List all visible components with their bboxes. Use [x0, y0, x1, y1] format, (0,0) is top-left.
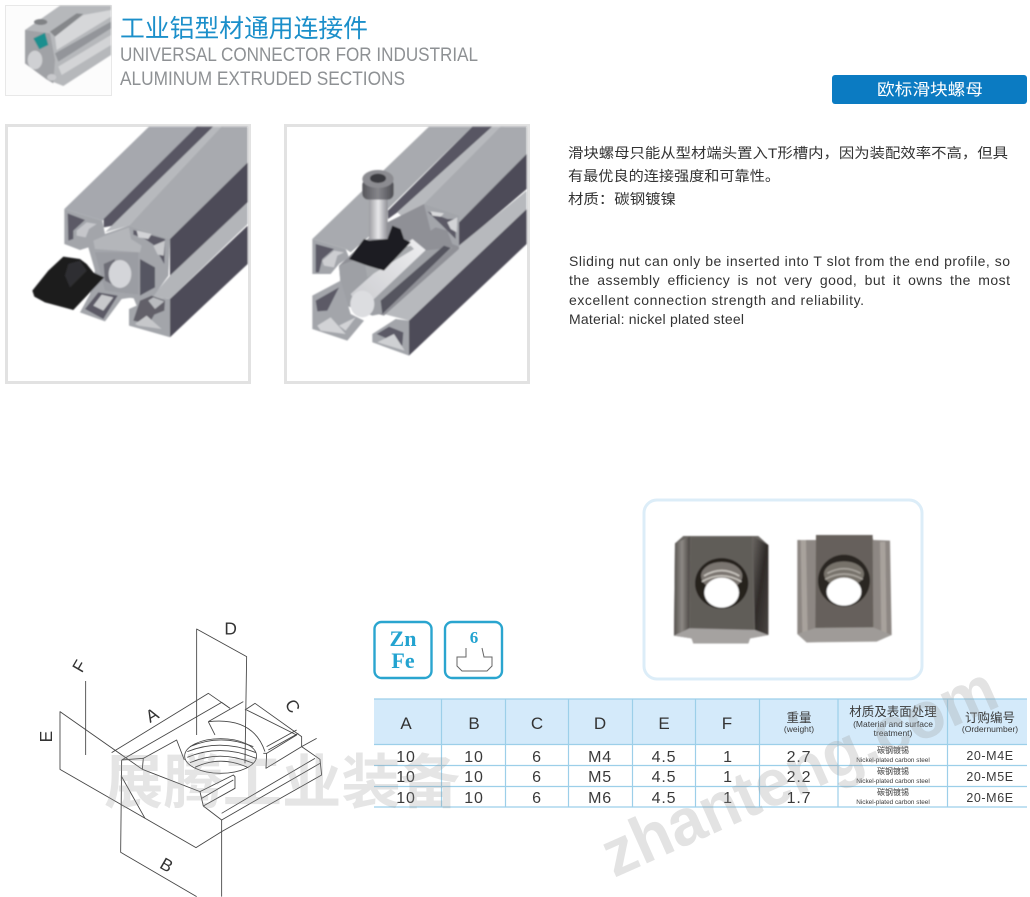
table row M6: 4.5	[652, 790, 676, 807]
watermark: site: zhanteng.com	[590, 650, 1008, 891]
table row M6: 1.7	[787, 790, 811, 807]
spec table	[374, 699, 1027, 807]
technical drawing of nut: C	[281, 696, 304, 716]
table row M4: 6	[532, 749, 542, 766]
table row M4: 1	[723, 749, 733, 766]
table row M6: 10	[396, 790, 416, 807]
spec table: 重量	[786, 710, 812, 725]
icon: material Zn Fe: Fe	[391, 648, 415, 673]
table row M6: M6	[588, 790, 612, 807]
table row M6: Nickel-plated carbon steel	[856, 799, 930, 806]
technical drawing of nut	[36, 618, 322, 897]
English description	[569, 253, 1010, 327]
spec table: 材质及表面处理	[849, 705, 937, 719]
table row M5: 6	[532, 769, 542, 786]
table row M6: 10	[464, 790, 484, 807]
table row M6: 碳钢镀锡	[877, 787, 909, 797]
table row M5: 10	[396, 769, 416, 786]
table row M5: M5	[588, 769, 612, 786]
table row M5: 2.2	[787, 769, 811, 786]
spec table: F	[722, 714, 732, 733]
icon: material Zn Fe	[374, 622, 432, 678]
table row M4: 2.7	[787, 749, 811, 766]
English description: excellent connection strength and reliability.	[569, 292, 864, 308]
icon: T slot size 6	[445, 622, 502, 678]
spec table: 订购编号	[965, 710, 1015, 725]
table row M5: 1	[723, 769, 733, 786]
table row M4: Nickel-plated carbon steel	[856, 757, 930, 764]
icon: T slot size 6: 6	[470, 628, 478, 647]
table row M5: 碳钢镀锡	[877, 766, 909, 776]
panel: profile with nut sliding in	[6, 126, 250, 382]
Chinese description: 有最优良的连接强度和可靠性。	[568, 168, 780, 185]
photo: right nut	[797, 535, 892, 642]
table row M6	[396, 787, 1014, 807]
table row M4: 10	[396, 749, 416, 766]
Chinese description	[568, 145, 1008, 208]
Chinese description: 材质：碳钢镀镍	[568, 191, 676, 208]
spec table: treatment)	[874, 728, 913, 738]
table row M4: 碳钢镀锡	[877, 745, 909, 755]
table row M5: 10	[464, 769, 484, 786]
spec table: A	[400, 714, 412, 733]
panel: nut photo	[644, 500, 922, 679]
English description: the assembly efficiency is not very good, but it owns the most	[569, 272, 1010, 288]
table row M4: 4.5	[652, 749, 676, 766]
technical drawing of nut: E	[36, 731, 56, 742]
spec table: (Material and surface	[853, 719, 933, 729]
watermark: company name: 展腾工业装备	[104, 750, 460, 816]
table row M5	[396, 766, 1014, 786]
category button: 欧标滑块螺母	[877, 81, 983, 99]
header thumbnail	[6, 6, 112, 96]
table row M5: 4.5	[652, 769, 676, 786]
table row M6: 20-M6E	[966, 791, 1014, 805]
technical drawing of nut: F	[68, 656, 91, 676]
technical drawing of nut: A	[142, 703, 162, 727]
category button	[832, 75, 1027, 104]
photo: left nut	[674, 536, 768, 643]
technical drawing of nut: D	[224, 618, 237, 638]
icon: material Zn Fe: Zn	[390, 626, 416, 651]
table row M4	[396, 745, 1014, 766]
table row M4: M4	[588, 749, 612, 766]
spec table: E	[658, 714, 670, 733]
English description: Sliding nut can only be inserted into T slot from the end profile, so	[569, 253, 1010, 269]
table row M4: 10	[464, 749, 484, 766]
table row M5: Nickel-plated carbon steel	[856, 778, 930, 785]
spec table: B	[468, 714, 480, 733]
table row M4: 20-M4E	[966, 749, 1014, 763]
spec table: C	[531, 714, 543, 733]
panel: profile with bolt and nut installed	[286, 126, 528, 382]
title: 工业铝型材通用连接件	[120, 15, 368, 43]
spec table: (Ordernumber)	[962, 724, 1018, 734]
subtitle line 2: ALUMINUM EXTRUDED SECTIONS	[120, 69, 405, 90]
table row M5: 20-M5E	[966, 770, 1014, 784]
table row M6: 6	[532, 790, 542, 807]
Chinese description: 滑块螺母只能从型材端头置入T形槽内，因为装配效率不高，但具	[568, 145, 1008, 162]
spec table: D	[594, 714, 606, 733]
English description: Material: nickel plated steel	[569, 311, 744, 327]
title	[120, 15, 478, 66]
table row M6: 1	[723, 790, 733, 807]
subtitle line 1: UNIVERSAL CONNECTOR FOR INDUSTRIAL	[120, 45, 478, 66]
spec table: (weight)	[784, 724, 814, 734]
table header row	[374, 699, 1027, 744]
technical drawing of nut: B	[157, 853, 177, 877]
